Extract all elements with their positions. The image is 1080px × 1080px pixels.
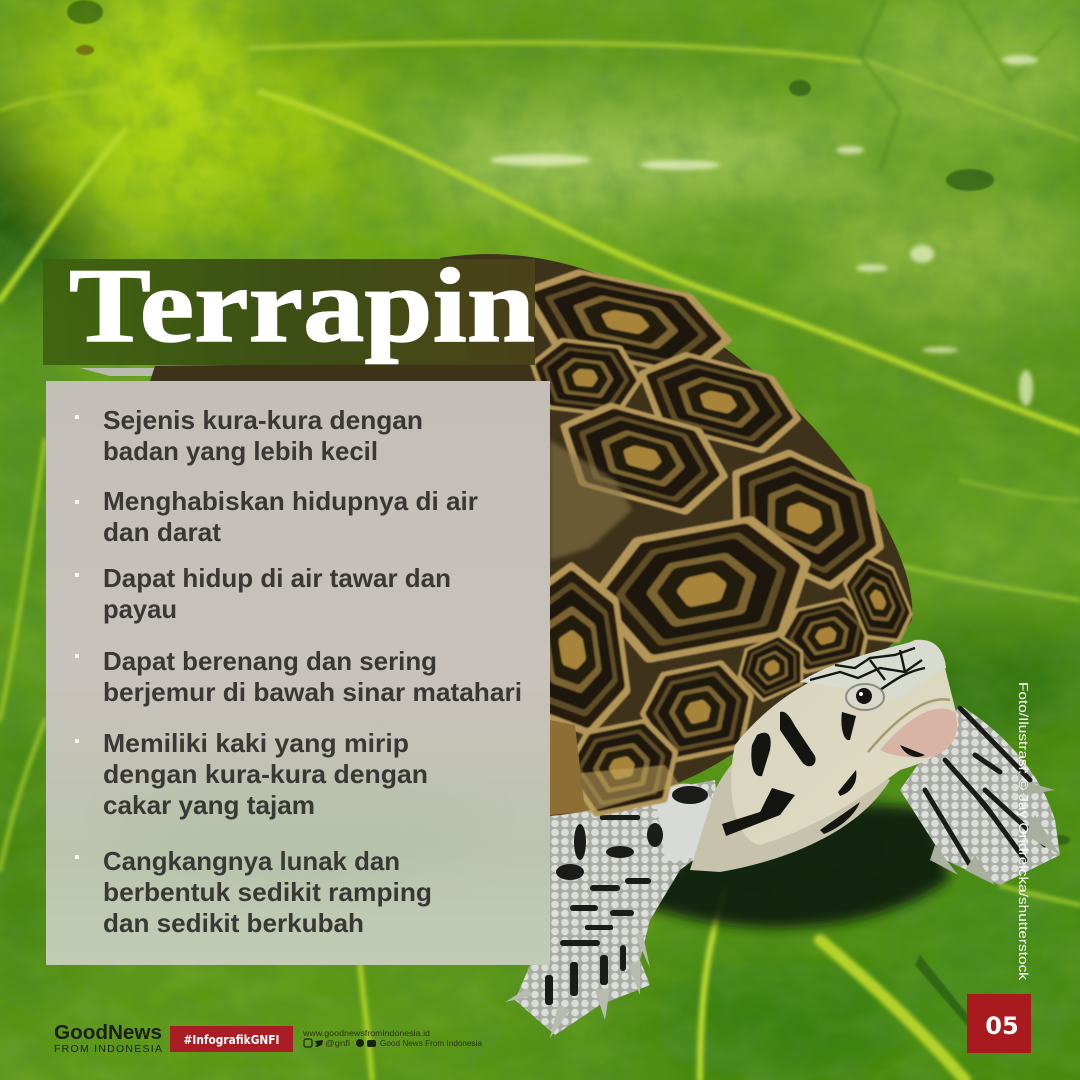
fact 5 <box>75 728 428 820</box>
footer logo: GoodNews From Indonesia: FROM INDONESIA <box>54 1043 162 1055</box>
turtle neck <box>690 720 890 872</box>
page number badge: 05 <box>985 1012 1019 1040</box>
turtle head <box>722 640 958 845</box>
text panel <box>46 381 550 965</box>
footer logo: GoodNews From Indonesia <box>54 1022 162 1055</box>
hashtag badge <box>170 1026 293 1052</box>
turtle front leg and foot <box>505 780 720 1038</box>
icons: instagram, twitter, facebook, youtube <box>304 1039 376 1047</box>
title bar <box>43 247 535 365</box>
title: Terrapin <box>69 247 535 364</box>
fact 5: dengan kura-kura dengan <box>103 759 428 789</box>
fact 1 <box>75 405 423 466</box>
fact 4: Dapat berenang dan sering <box>103 646 437 676</box>
fact 1: badan yang lebih kecil <box>103 436 378 466</box>
fact 3 <box>75 563 451 624</box>
footer links and social icons: www.goodnewsfromindonesia.id <box>302 1028 430 1038</box>
turtle shell <box>150 254 917 816</box>
fact 6: Cangkangnya lunak dan <box>103 846 400 876</box>
turtle tail stripe <box>80 368 155 376</box>
fact 2: Menghabiskan hidupnya di air <box>103 486 478 516</box>
fact 6: berbentuk sedikit ramping <box>103 877 432 907</box>
footer logo: GoodNews From Indonesia: GoodNews <box>54 1022 162 1044</box>
turtle hind foot <box>900 705 1060 885</box>
fact 4 <box>75 646 522 707</box>
fact 6 <box>75 846 432 938</box>
turtle illustration <box>80 254 1060 1038</box>
footer links and social icons: Good News From Indonesia <box>380 1038 482 1048</box>
fact 3: Dapat hidup di air tawar dan <box>103 563 451 593</box>
fact 2: dan darat <box>103 517 221 547</box>
shadow under turtle <box>640 804 950 928</box>
page number badge <box>967 994 1031 1053</box>
fact 3: payau <box>103 594 177 624</box>
footer links and social icons <box>302 1028 482 1048</box>
footer links and social icons: @gnfi <box>325 1038 350 1048</box>
fact 4: berjemur di bawah sinar matahari <box>103 677 522 707</box>
hashtag badge: #InfografikGNFI <box>184 1033 280 1047</box>
fact 5: Memiliki kaki yang mirip <box>103 728 409 758</box>
fact 5: cakar yang tajam <box>103 790 315 820</box>
fact 2 <box>75 486 478 547</box>
shell tan patch <box>550 440 632 560</box>
fact 1: Sejenis kura-kura dengan <box>103 405 423 435</box>
fact 6: dan sedikit berkubah <box>103 908 364 938</box>
photo credit: Foto/Ilustrasi: © Jay Ondreicka/shutterstock <box>1016 682 1031 981</box>
